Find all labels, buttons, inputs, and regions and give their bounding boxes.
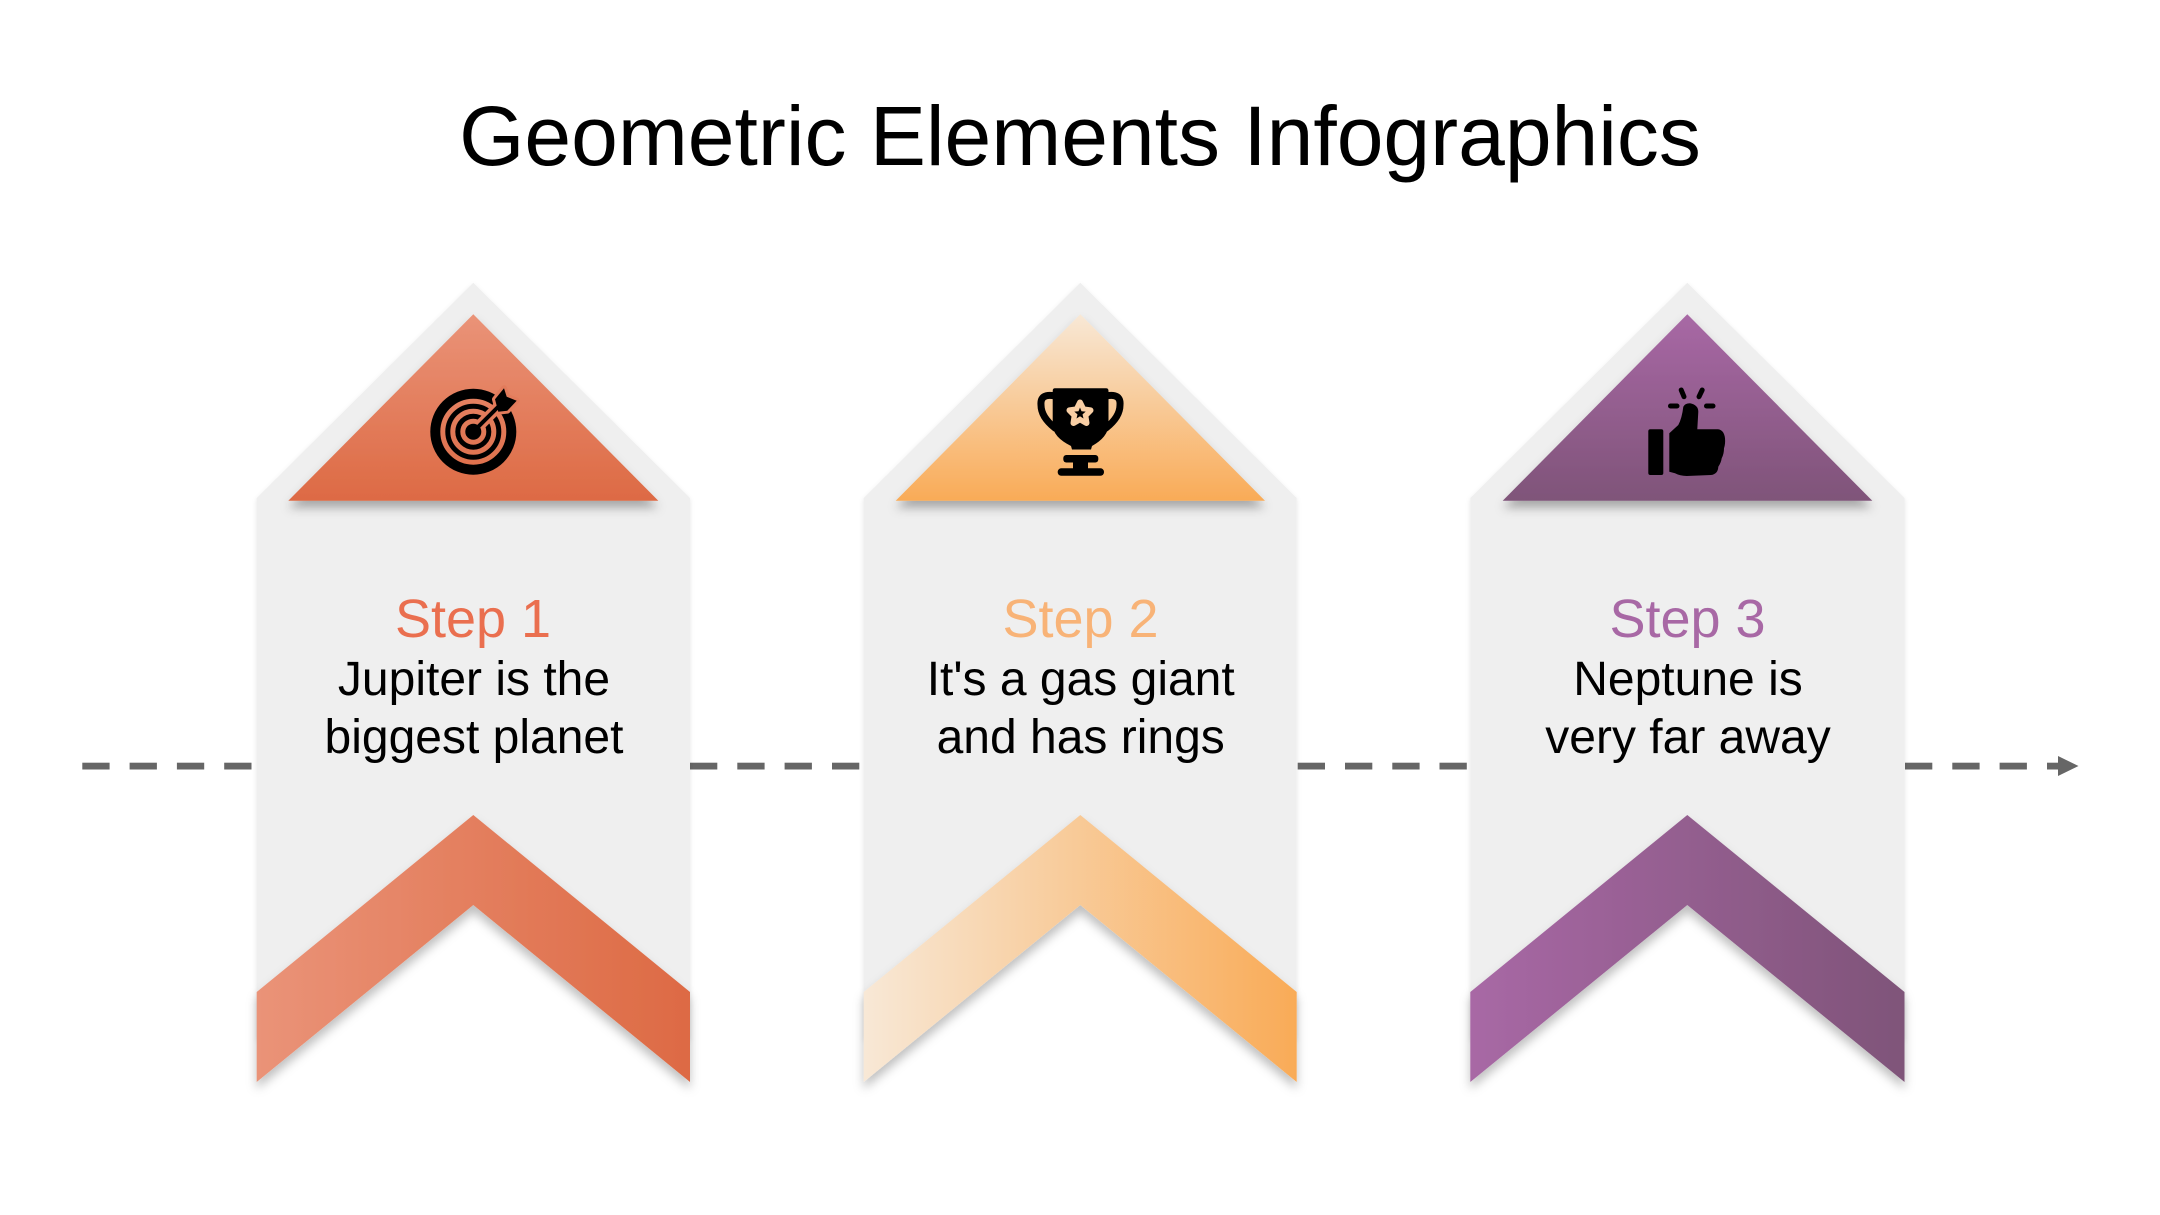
icon: target with dart [435,388,517,470]
title: Geometric Elements Infographics [459,89,1701,183]
panel: step 1 [257,283,690,1082]
text: step 1 heading: Step 1 [395,589,551,649]
panel: step 3 [1470,283,1904,1082]
icon: trophy [1041,388,1120,476]
text: step 3 description: very far away [1545,711,1831,764]
text: step 1 description: biggest planet [325,711,623,764]
text: step 2 description: It's a gas giant [927,653,1235,706]
triangle: step 3 header [1503,314,1872,501]
text: step 3 heading: Step 3 [1609,589,1766,649]
chevron: step 1 [257,815,690,1082]
dashed timeline arrow [82,756,2078,776]
icon: thumbs up [1648,390,1725,476]
triangle: step 2 header [896,314,1265,501]
text: step 1 description [325,653,623,764]
chevron: step 3 [1470,815,1904,1082]
text: step 2 description [927,653,1235,764]
triangle: step 1 header [288,314,658,501]
text: step 2 heading: Step 2 [1002,589,1159,649]
panel: step 2 [864,283,1297,1082]
chevron: step 2 [864,815,1297,1082]
text: step 3 description: Neptune is [1573,653,1803,706]
text: step 2 description: and has rings [937,711,1225,764]
text: step 1 description: Jupiter is the [338,653,610,706]
text: step 3 description [1545,653,1831,764]
